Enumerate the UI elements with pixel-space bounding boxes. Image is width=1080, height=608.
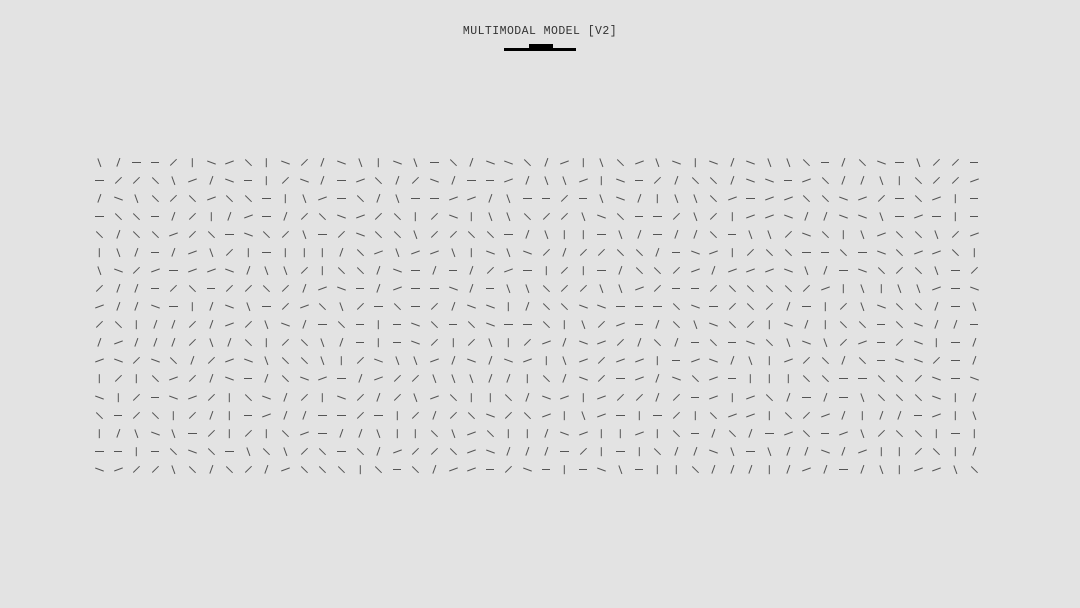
stroke row 14 xyxy=(95,393,976,402)
stroke row 3 xyxy=(97,194,978,204)
stroke row 12 xyxy=(95,356,976,366)
stroke row 2 xyxy=(95,176,979,186)
stroke row 11 xyxy=(97,338,976,348)
stroke row 4 xyxy=(95,212,978,222)
orientation stroke grid xyxy=(95,158,979,474)
stroke row 1 xyxy=(97,158,978,168)
stroke row 16 xyxy=(98,429,975,438)
stroke row 10 xyxy=(96,320,978,330)
stroke row 8 xyxy=(96,284,979,294)
stroke row 17 xyxy=(95,447,976,456)
stroke row 13 xyxy=(98,374,979,384)
stroke row 7 xyxy=(97,266,978,276)
stroke row 9 xyxy=(95,302,976,312)
title underline mark xyxy=(504,44,576,51)
stroke row 6 xyxy=(98,248,975,258)
stroke row 18 xyxy=(95,465,978,474)
title: MULTIMODAL MODEL [V2] xyxy=(463,25,617,38)
stroke row 15 xyxy=(96,411,976,420)
stroke row 5 xyxy=(96,230,979,240)
